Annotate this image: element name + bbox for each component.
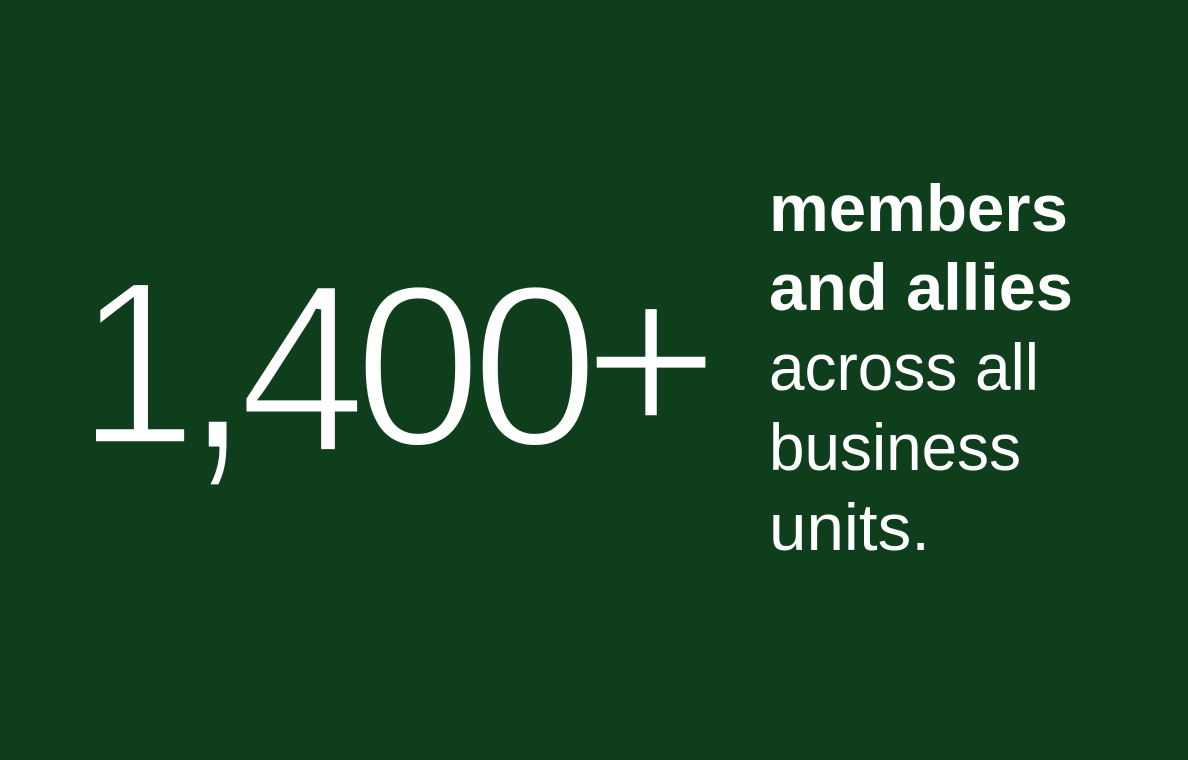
big number: 1,400+: + [582,232,720,487]
big number: 1,400+: 0 [354,237,482,495]
description text: units. [769,490,930,564]
big number: 1,400+: , [183,182,252,513]
big number: 1,400+: 4 [238,234,367,504]
description text: and allies [769,250,1073,324]
big number: 1,400+: 0 [471,237,599,495]
description text: across all [769,330,1039,404]
description text: members [769,171,1068,245]
description text: business [769,410,1021,484]
description text [769,171,1073,564]
big number: 1,400+ [77,182,720,513]
big number: 1,400+: 1 [77,232,197,494]
